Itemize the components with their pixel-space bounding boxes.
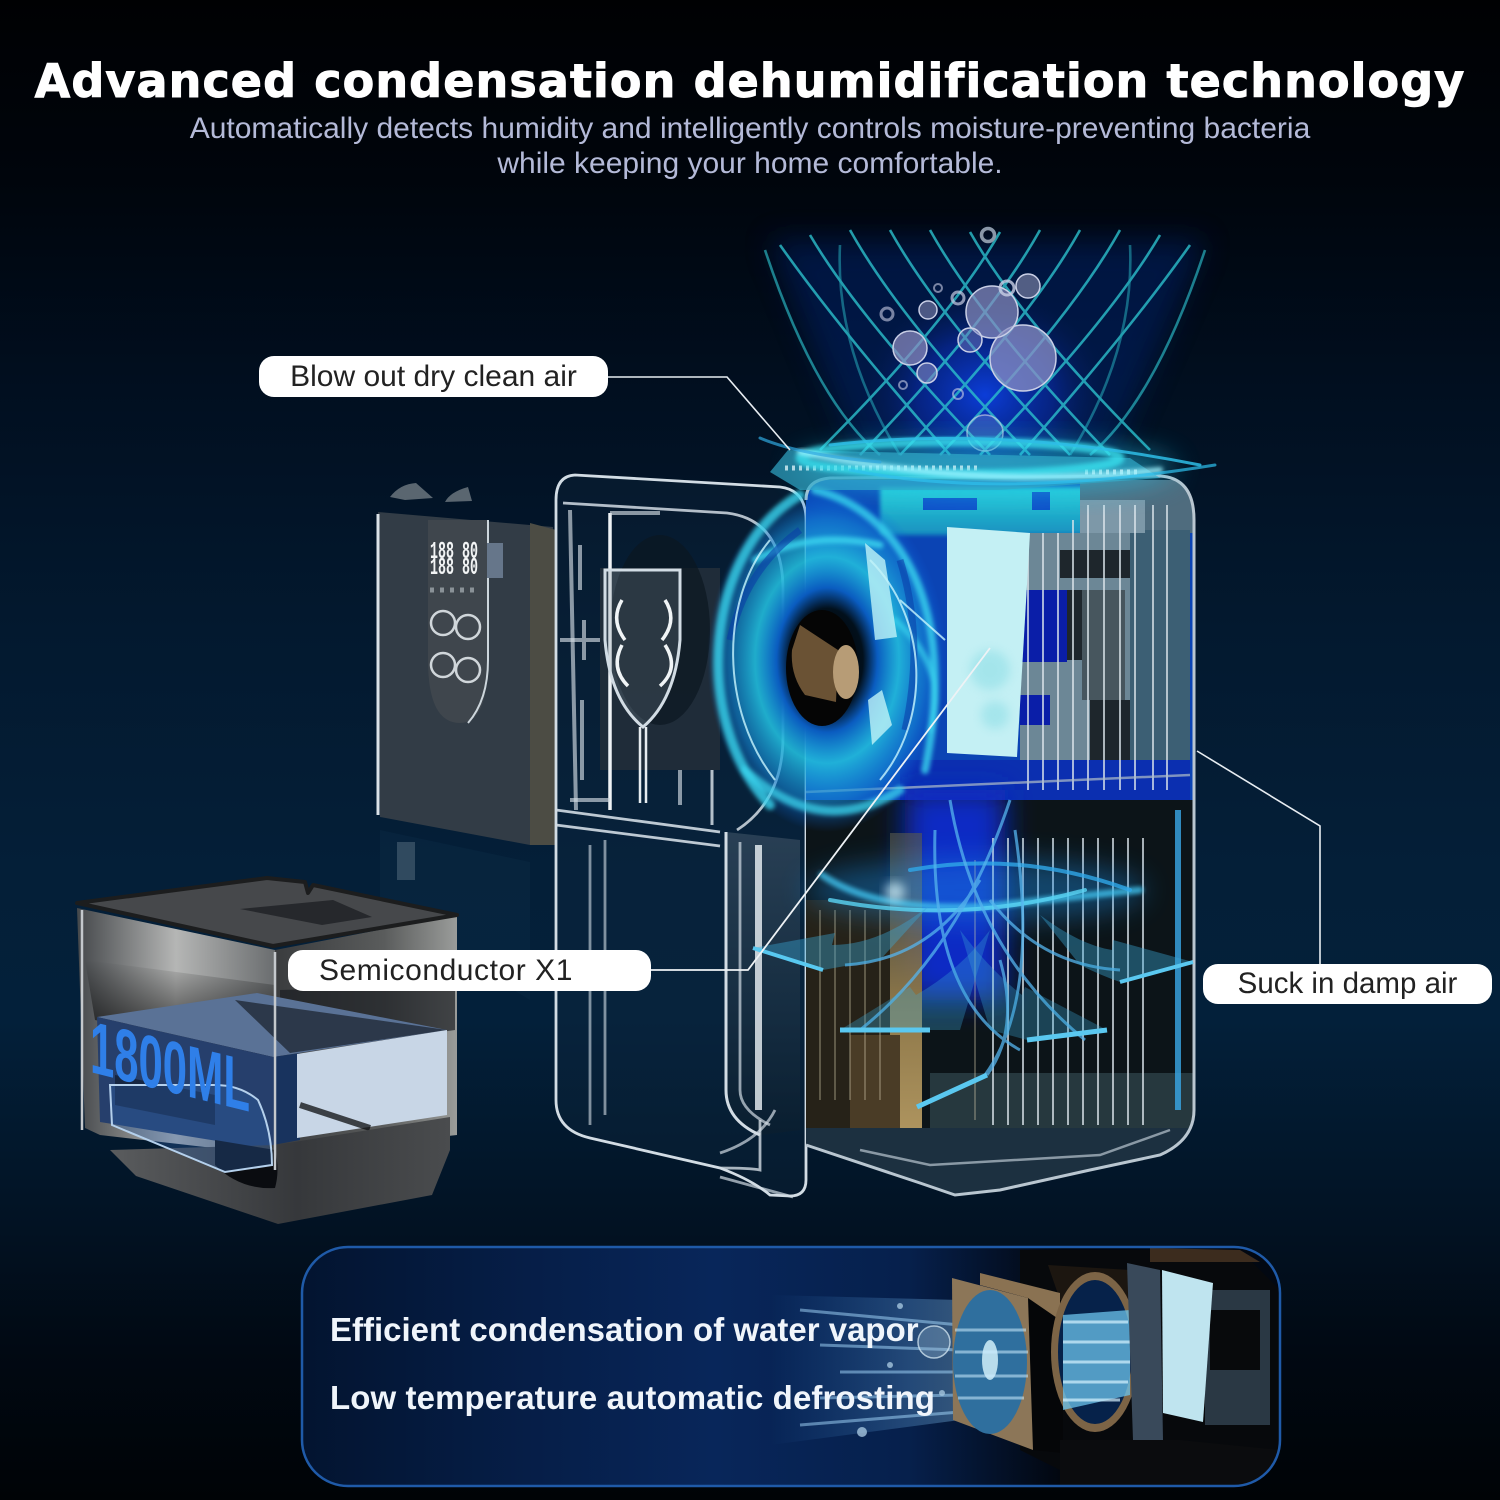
water tank with 1800ML label: 1800ML: [90, 1005, 250, 1128]
water tank with 1800ML label: [77, 878, 457, 1224]
icon: airflow streams: [798, 1296, 955, 1441]
callout: semiconductor: Semiconductor X1: [319, 954, 573, 987]
callout: blow out dry clean air: [259, 356, 608, 397]
airflow swirl and fan: [707, 438, 1215, 1107]
arrows: translucent air direction arrows: [753, 905, 1193, 1107]
icon: fan and condenser module: [952, 1248, 1280, 1490]
main dehumidifier body: [806, 476, 1200, 1200]
subtitle: Automatically detects humidity and intelligently controls moisture-preventing bacteria: [190, 112, 1310, 145]
callout: semiconductor: [288, 950, 651, 991]
text: low temperature defrosting: Low temperature automatic defrosting: [330, 1379, 935, 1416]
callout: suck in damp air: [1203, 964, 1492, 1004]
panel: bottom module: [302, 1247, 1280, 1490]
icon: air mesh funnel with bubbles: [765, 228, 1205, 500]
callout: suck in damp air: Suck in damp air: [1238, 967, 1457, 1000]
callout line: blow out: [606, 377, 790, 450]
subtitle: [190, 112, 1310, 180]
callout: blow out dry clean air: Blow out dry clean air: [290, 360, 577, 393]
top air outlet grille: [770, 450, 1160, 490]
callout line: suck in: [1197, 751, 1320, 965]
control panel cover: 188 80: [430, 539, 478, 566]
icon: droplets: [857, 1303, 950, 1437]
control panel cover: [378, 483, 557, 1000]
product illustration: [75, 226, 1321, 1488]
subtitle: while keeping your home comfortable.: [497, 146, 1003, 180]
title: Advanced condensation dehumidification technology: [35, 54, 1465, 108]
transparent front shell: [556, 475, 806, 1197]
text: efficient condensation: Efficient condensation of water vapor: [330, 1311, 919, 1348]
callout line: semiconductor: [650, 648, 990, 970]
control panel cover: 188 80: [430, 555, 478, 582]
